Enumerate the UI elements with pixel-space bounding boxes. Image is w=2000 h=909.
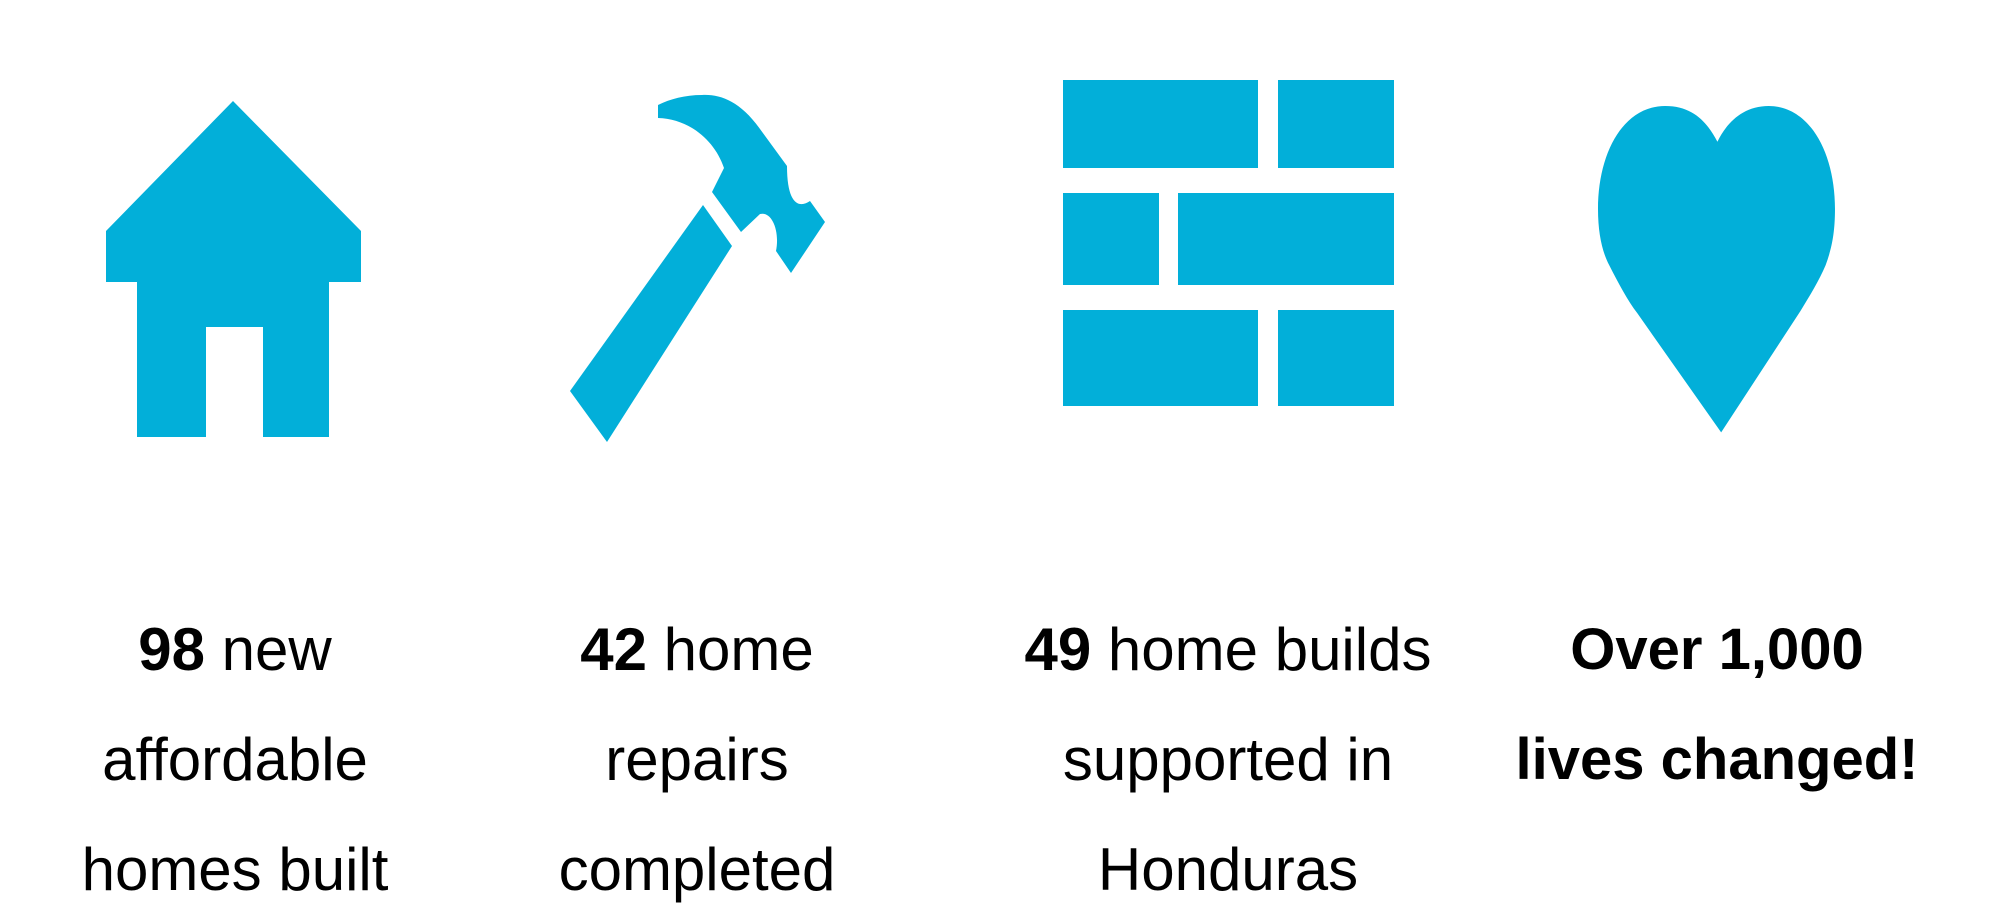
text: new homes: 98 new: [138, 616, 332, 683]
icon: house: [106, 101, 361, 437]
text: repairs: completed: [559, 836, 835, 903]
text: lives changed: [1516, 617, 1918, 792]
text: new homes: homes built: [82, 836, 388, 903]
icon: brick wall: [1063, 80, 1394, 406]
text: lives changed: lives changed!: [1516, 727, 1918, 792]
text: repairs: repairs: [605, 726, 789, 793]
text: repairs: [559, 616, 835, 903]
icon: heart: [1598, 106, 1835, 432]
text: repairs: 42 home: [580, 616, 814, 683]
text: Honduras: 49 home builds: [1025, 616, 1431, 683]
text: new homes: [82, 616, 388, 903]
text: lives changed: Over 1,000: [1570, 617, 1864, 682]
text: new homes: affordable: [102, 726, 368, 793]
text: Honduras: [1025, 616, 1431, 903]
icon: hammer: [570, 95, 825, 442]
text: Honduras: supported in: [1063, 726, 1393, 793]
text: Honduras: Honduras: [1098, 836, 1358, 903]
